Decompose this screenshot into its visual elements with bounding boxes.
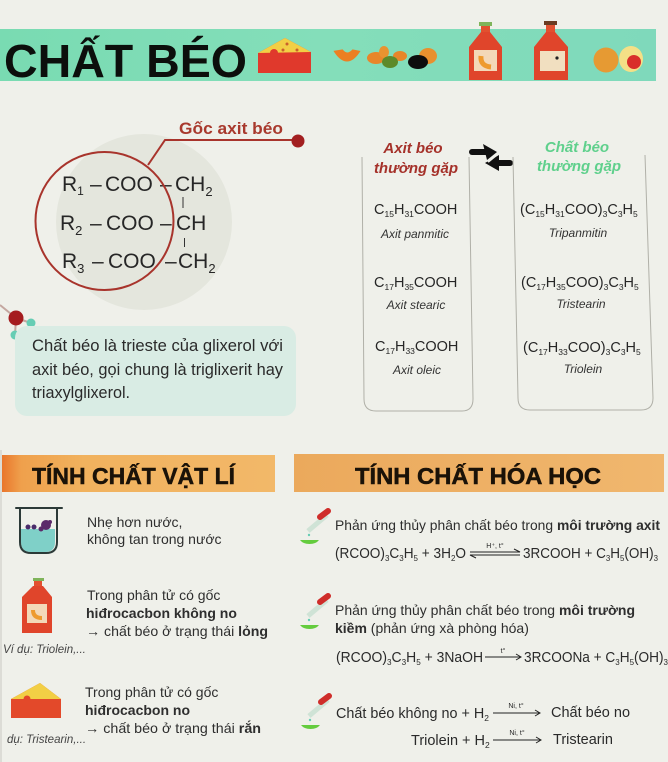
- fat: tripanmitin: 3: [603, 209, 608, 219]
- fat: triolein: C: [610, 340, 621, 356]
- formula: –: [90, 212, 102, 235]
- fat: triolein: [523, 340, 641, 376]
- text: lighter than water: Nhẹ hơn nước,: [87, 514, 182, 530]
- acid: oleic: COOH: [415, 339, 458, 355]
- text: unsaturated means liquid: hiđrocacbon không no: [86, 605, 237, 621]
- equation: acid hydrolysis: (RCOO): [335, 546, 388, 562]
- arrows: equilibrium between acids and fats: [472, 144, 510, 171]
- equation: saponification: H: [620, 650, 630, 666]
- equation: acid hydrolysis: 5: [620, 553, 625, 563]
- acid: oleic: Axit oleic: [392, 363, 441, 377]
- formula: R: [60, 212, 75, 235]
- formula: COO: [108, 250, 156, 273]
- equation: saponification: t°: [501, 647, 506, 655]
- panel: chemical properties: [294, 454, 668, 750]
- heading band: [294, 454, 664, 492]
- acid: stearic: H: [394, 275, 404, 291]
- fat: tristearin: 3: [604, 282, 609, 292]
- formula: [60, 173, 216, 276]
- text: saturated means solid: hiđrocacbon no: [85, 702, 190, 718]
- fat: tripanmitin: Tripanmitin: [549, 226, 608, 240]
- formula: 2: [208, 261, 216, 276]
- reaction: triolein to tristearin: [411, 729, 613, 750]
- heading: [374, 140, 458, 177]
- equation: acid hydrolysis: 2: [451, 553, 456, 563]
- acid: oleic: H: [395, 339, 405, 355]
- equation: saponification: 5: [416, 657, 421, 667]
- acid: panmitic: COOH: [414, 202, 457, 218]
- fat: tripanmitin: 31: [555, 209, 565, 219]
- title banner: [0, 21, 656, 87]
- equation: saponification: C: [392, 650, 402, 666]
- formula: –: [165, 250, 177, 273]
- equation: saponification: [336, 647, 668, 667]
- definition text: triaxylglixerol.: [32, 384, 130, 402]
- heading: thường gặp: [537, 158, 621, 175]
- heading band: TÍNH CHẤT VẬT LÍ: [32, 462, 236, 489]
- equation: saponification: 3: [402, 657, 406, 667]
- icon: cheese: [258, 38, 311, 73]
- reaction: hydrogenation general: [336, 702, 630, 723]
- fat: tristearin: (C: [521, 275, 536, 291]
- acid: stearic: 17: [384, 282, 394, 292]
- acid: panmitic: Axit panmitic: [380, 227, 449, 241]
- column: common fatty acids: [362, 140, 473, 411]
- acid: stearic: Axit stearic: [386, 298, 445, 312]
- fat: tristearin: H: [546, 275, 556, 291]
- text: saturated means solid: → chất béo ở trạng thái rắn: [85, 719, 261, 736]
- icon: cheese: [11, 683, 61, 718]
- icon: dropper acid: [300, 511, 328, 544]
- text: unsaturated means liquid: → chất béo ở trạng thái lỏng: [86, 623, 268, 639]
- equation: acid hydrolysis: 3: [606, 553, 610, 563]
- callout ring: [36, 140, 298, 290]
- fat: triolein: H: [626, 340, 636, 356]
- formula: CH: [176, 212, 206, 235]
- equation: acid hydrolysis: (OH): [624, 546, 654, 562]
- fat: triolein: 3: [606, 347, 611, 357]
- fat: tristearin: [521, 275, 639, 311]
- reaction: triolein to tristearin: Ni, t°: [509, 729, 525, 737]
- equation: saponification: (RCOO): [336, 650, 389, 666]
- example: tristearin: dụ: Tristearin,...: [7, 734, 86, 746]
- formula: COO: [105, 173, 153, 196]
- equation: acid hydrolysis: 3: [654, 553, 658, 563]
- panel: physical properties: [2, 455, 275, 746]
- heading: thường gặp: [374, 160, 458, 177]
- acid: stearic: C: [374, 275, 384, 291]
- fat: tristearin: 3: [619, 282, 624, 292]
- acid: oleic: [375, 339, 458, 377]
- fat: triolein: COO): [568, 340, 606, 356]
- equation: saponification: (OH): [634, 650, 664, 666]
- equation: saponification: + 3NaOH: [421, 650, 483, 666]
- fat: triolein: 5: [636, 347, 641, 357]
- acid: stearic: [374, 275, 457, 312]
- heading band: [2, 455, 275, 492]
- equation: acid hydrolysis: C: [389, 546, 399, 562]
- icon: dropper alkali: [300, 596, 328, 629]
- text: alkaline hydrolysis: Phản ứng thủy phân chất béo trong môi trường: [335, 602, 635, 618]
- acid: oleic: C: [375, 339, 385, 355]
- equation: saponification: H: [406, 650, 416, 666]
- heading: Chất béo: [545, 139, 609, 156]
- acid: stearic: COOH: [414, 275, 457, 291]
- fat: tristearin: H: [624, 275, 634, 291]
- formula: 2: [75, 223, 82, 238]
- equation: saponification: 3: [615, 657, 620, 667]
- fat: triolein: H: [548, 340, 558, 356]
- text: saturated means solid: [85, 684, 261, 736]
- definition text: axit béo, gọi chung là triglixerit hay: [32, 361, 284, 379]
- icon: beaker: [16, 508, 62, 553]
- equation: acid hydrolysis: H: [610, 546, 620, 562]
- fat: tristearin: COO): [566, 275, 604, 291]
- fat: triolein: Triolein: [564, 362, 603, 376]
- acid: panmitic: 15: [384, 209, 394, 219]
- heading band: TÍNH CHẤT HÓA HỌC: [355, 462, 601, 489]
- text: lighter than water: [87, 514, 222, 547]
- fat: tristearin: 35: [556, 282, 566, 292]
- formula: –: [160, 212, 172, 235]
- reaction: hydrogenation general: Ni, t°: [508, 702, 524, 710]
- text: lighter than water: không tan trong nước: [87, 531, 222, 547]
- equation: saponification: 5: [630, 657, 634, 667]
- text: unsaturated means liquid: [86, 587, 268, 639]
- equation: acid hydrolysis: 3: [385, 553, 390, 563]
- example: triolein: Ví dụ: Triolein,...: [3, 644, 86, 656]
- fat: tripanmitin: [520, 202, 638, 240]
- definition text: Chất béo là trieste của glixerol với: [32, 337, 283, 355]
- text: unsaturated means liquid: Trong phân tử có gốc: [87, 587, 220, 603]
- fat: tripanmitin: C: [607, 202, 618, 218]
- equation: saponification: 3: [387, 657, 392, 667]
- reaction: hydrogenation general: 2: [484, 713, 489, 723]
- text: saturated means solid: Trong phân tử có gốc: [85, 684, 218, 700]
- text: acid hydrolysis: Phản ứng thủy phân chất béo trong môi trường axit: [335, 517, 660, 533]
- equation: acid hydrolysis: [335, 542, 658, 563]
- formula: 3: [77, 261, 84, 276]
- heading: [537, 139, 621, 175]
- icon: dropper hydrogenation: [301, 696, 329, 729]
- callout label: Gốc axit béo: [179, 119, 283, 138]
- definition box: [15, 326, 296, 416]
- formula: –: [92, 250, 104, 273]
- fat: tripanmitin: H: [545, 202, 555, 218]
- fat: triolein: (C: [523, 340, 538, 356]
- panel: glycerol triester structure: [36, 119, 304, 310]
- formula: R: [62, 173, 77, 196]
- text: alkaline hydrolysis: [335, 602, 635, 636]
- acid: panmitic: H: [394, 202, 404, 218]
- icon: beans and nuts: [336, 46, 437, 69]
- acid: panmitic: C: [374, 202, 384, 218]
- fat: triolein: 33: [558, 347, 568, 357]
- fat: tripanmitin: 15: [535, 209, 545, 219]
- formula: 2: [205, 184, 213, 199]
- reaction: triolein to tristearin: Triolein + H: [411, 733, 485, 749]
- column: common fats: [513, 139, 653, 410]
- equation: acid hydrolysis: H: [404, 546, 414, 562]
- acid: stearic: 35: [404, 282, 414, 292]
- acid: panmitic: 31: [404, 209, 414, 219]
- fat: tripanmitin: 3: [618, 209, 623, 219]
- fat: tripanmitin: (C: [520, 202, 535, 218]
- acid: oleic: 33: [405, 346, 415, 356]
- reaction: hydrogenation general: Chất béo không no + H: [336, 706, 486, 722]
- equation: acid hydrolysis: H⁺, t°: [486, 542, 504, 550]
- equation: acid hydrolysis: + 3H: [418, 546, 451, 562]
- equation: acid hydrolysis: O: [455, 546, 466, 562]
- fat: triolein: 17: [538, 347, 548, 357]
- title: CHẤT BÉO: [4, 35, 247, 87]
- fat: triolein: 3: [621, 347, 626, 357]
- formula: 1: [77, 184, 84, 198]
- fat: tripanmitin: COO): [565, 202, 603, 218]
- definition text: [32, 337, 284, 402]
- formula: COO: [106, 212, 154, 235]
- fat: tripanmitin: 5: [633, 209, 638, 219]
- icon: oil bottle: [22, 578, 52, 633]
- equation: saponification: 3RCOONa + C: [524, 650, 621, 666]
- equation: acid hydrolysis: 3RCOOH + C: [523, 546, 612, 562]
- icon: oil bottle 1: [469, 22, 502, 80]
- acid: oleic: 17: [385, 346, 395, 356]
- formula: –: [90, 173, 102, 196]
- reaction: triolein to tristearin: 2: [485, 740, 490, 750]
- fat: tripanmitin: H: [623, 202, 633, 218]
- fat: tristearin: 17: [536, 282, 546, 292]
- text: alkaline hydrolysis: kiềm (phản ứng xà phòng hóa): [335, 620, 529, 636]
- formula: CH: [178, 250, 208, 273]
- icon: molecule: [0, 305, 36, 340]
- fat: tristearin: 5: [634, 282, 639, 292]
- icon: oil bottle 2: [534, 21, 568, 80]
- equation: acid hydrolysis: 3: [399, 553, 404, 563]
- background disc: [56, 134, 232, 310]
- icon: egg and bread: [594, 46, 643, 72]
- fat: tristearin: C: [608, 275, 619, 291]
- acid: panmitic: [374, 202, 457, 241]
- reaction: triolein to tristearin: Tristearin: [553, 732, 613, 748]
- reaction: hydrogenation general: Chất béo no: [551, 705, 630, 721]
- formula: CH: [175, 173, 205, 196]
- heading: Axit béo: [382, 140, 443, 157]
- formula: –: [160, 173, 172, 196]
- fat: tristearin: Tristearin: [556, 297, 606, 311]
- formula: R: [62, 250, 77, 273]
- equation: acid hydrolysis: 5: [414, 553, 418, 563]
- callout dot: [292, 134, 304, 148]
